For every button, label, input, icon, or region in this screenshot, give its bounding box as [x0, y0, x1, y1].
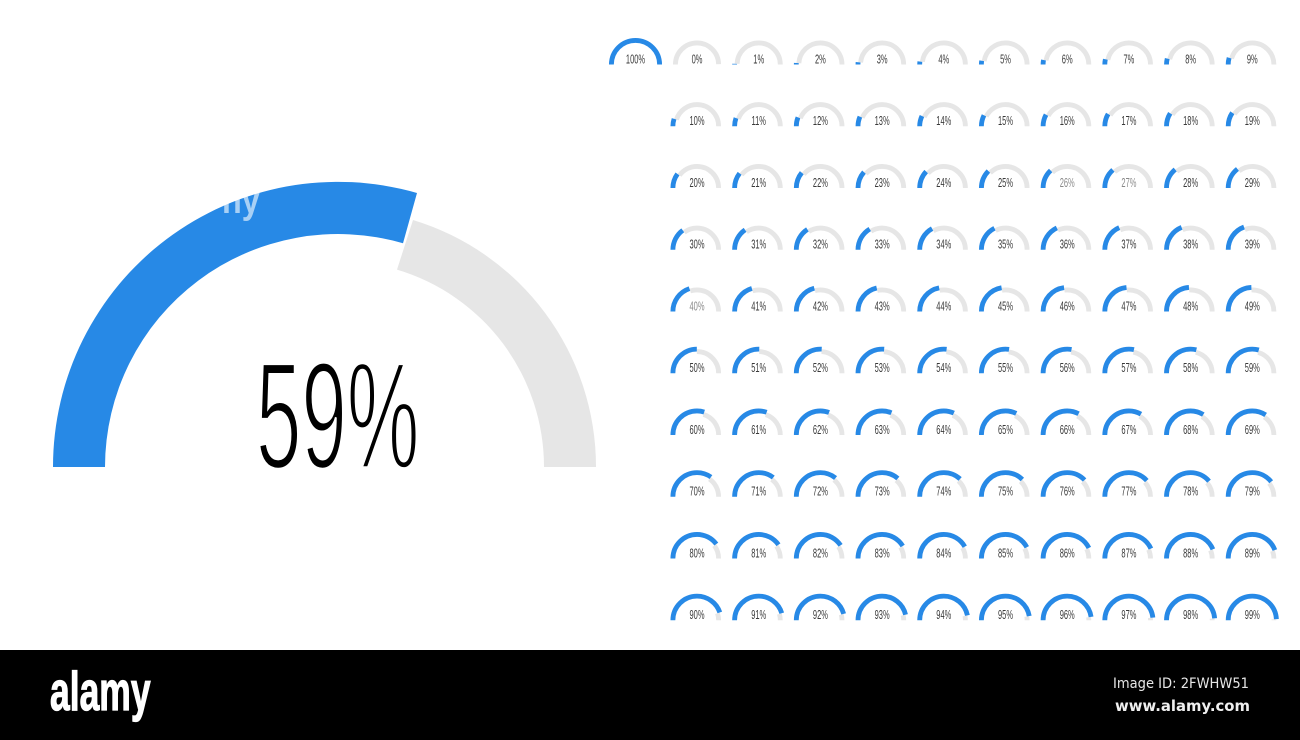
gauge 84%: 84%: [936, 548, 951, 561]
gauge 89%: 89%: [1245, 548, 1260, 561]
gauge 80%: [673, 534, 721, 561]
gauge 54%: [920, 349, 968, 376]
gauge 86%: 86%: [1060, 548, 1075, 561]
gauge 61%: 61%: [751, 424, 766, 438]
gauge 50%: 50%: [690, 362, 704, 376]
gauge 88%: [1166, 534, 1215, 561]
gauge 83%: [858, 534, 906, 561]
gauge 19%: [1228, 102, 1276, 129]
gauge 53%: 53%: [875, 362, 890, 376]
gauge 91%: 91%: [751, 609, 766, 623]
gauge 2%: [796, 40, 844, 67]
gauge 78%: [1166, 473, 1215, 499]
gauge 43%: [858, 287, 906, 314]
gauge 75%: 75%: [998, 486, 1013, 499]
gauge 68%: [1166, 411, 1215, 438]
gauge 92%: 92%: [813, 609, 828, 623]
gauge 23%: 23%: [875, 177, 890, 191]
gauge 12%: [796, 102, 844, 129]
gauge 94%: 94%: [936, 609, 951, 623]
gauge 43%: 43%: [875, 301, 890, 314]
gauge 29%: 29%: [1245, 177, 1260, 191]
gauge 33%: 33%: [875, 239, 890, 252]
gauge 67%: [1105, 411, 1153, 438]
gauge 69%: 69%: [1245, 424, 1260, 438]
gauge 21%: 21%: [751, 177, 766, 191]
gauge 44%: [920, 287, 968, 314]
gauge 65%: [981, 411, 1030, 438]
gauge 57%: 57%: [1121, 362, 1136, 376]
gauge 25%: [981, 164, 1030, 191]
gauge 36%: [1043, 226, 1091, 252]
gauge 82%: [796, 534, 844, 561]
gauge 61%: [735, 411, 783, 438]
gauge 19%: 19%: [1245, 115, 1260, 129]
gauge 18%: [1166, 102, 1215, 129]
gauge 56%: [1043, 349, 1091, 376]
gauge 11%: 11%: [751, 115, 766, 129]
gauge 8%: [1166, 40, 1215, 67]
gauge 18%: 18%: [1183, 115, 1198, 129]
gauge 69%: [1228, 411, 1276, 438]
gauge 87%: [1105, 534, 1153, 561]
gauge 10%: 10%: [690, 115, 704, 129]
gauge 20%: [673, 164, 721, 191]
gauge 97%: [1105, 596, 1153, 623]
alamy logo: alamy: [50, 660, 151, 722]
gauge 58%: [1166, 349, 1215, 376]
gauge 25%: 25%: [998, 177, 1013, 191]
gauge 23%: [858, 164, 906, 191]
gauge 48%: [1166, 287, 1215, 314]
gauge 14%: [920, 102, 968, 129]
gauge 72%: [796, 473, 844, 499]
gauge 49%: [1228, 287, 1276, 314]
gauge 14%: 14%: [936, 115, 951, 129]
gauge 77%: [1105, 473, 1153, 499]
gauge 77%: 77%: [1121, 486, 1136, 499]
gauge 70%: 70%: [690, 486, 704, 499]
gauge 38%: [1166, 226, 1215, 252]
gauge 82%: 82%: [813, 548, 828, 561]
gauge 68%: 68%: [1183, 424, 1198, 438]
gauge 37%: [1105, 226, 1153, 252]
gauge 71%: 71%: [751, 486, 766, 499]
gauge 35%: 35%: [998, 239, 1013, 252]
gauge 75%: [981, 473, 1030, 499]
footer band: [0, 650, 1300, 740]
gauge 93%: 93%: [875, 609, 890, 623]
gauge 39%: 39%: [1245, 239, 1260, 252]
gauge 15%: [981, 102, 1030, 129]
gauge 30%: 30%: [690, 239, 704, 252]
gauge 100%: [611, 40, 660, 67]
gauge 22%: 22%: [813, 177, 828, 191]
gauge 47%: 47%: [1121, 301, 1136, 314]
gauge 8%: 8%: [1185, 54, 1196, 67]
gauge 7%: 7%: [1123, 54, 1134, 67]
gauge 74%: 74%: [936, 486, 951, 499]
gauge 42%: [796, 287, 844, 314]
gauge 27%: [1105, 164, 1153, 191]
gauge 52%: 52%: [813, 362, 828, 376]
gauge 41%: 41%: [751, 301, 766, 314]
gauge 55%: [981, 349, 1030, 376]
gauge 90%: [673, 596, 721, 623]
gauge 9%: [1228, 40, 1276, 67]
gauge 99%: 99%: [1245, 609, 1260, 623]
gauge 55%: 55%: [998, 362, 1013, 376]
gauge 79%: 79%: [1245, 486, 1260, 499]
gauge 92%: [796, 596, 844, 623]
gauge 4%: [920, 40, 968, 67]
gauge 54%: 54%: [936, 362, 951, 376]
gauge 46%: [1043, 287, 1091, 314]
gauge 73%: 73%: [875, 486, 890, 499]
gauge 56%: 56%: [1060, 362, 1075, 376]
gauge 26%: 26%: [1060, 177, 1075, 191]
gauge 52%: [796, 349, 844, 376]
gauge 98%: 98%: [1183, 609, 1198, 623]
gauge 36%: 36%: [1060, 239, 1075, 252]
website: www.alamy.com: [1115, 697, 1250, 715]
gauge 76%: 76%: [1060, 486, 1075, 499]
gauge 60%: 60%: [690, 424, 704, 438]
gauge 48%: 48%: [1183, 301, 1198, 314]
watermark fragment: ny: [222, 180, 260, 222]
gauge 31%: 31%: [751, 239, 766, 252]
gauge 66%: 66%: [1060, 424, 1075, 438]
gauge 97%: 97%: [1121, 609, 1136, 623]
gauge 1%: [735, 40, 783, 67]
gauge 72%: 72%: [813, 486, 828, 499]
gauge 85%: 85%: [998, 548, 1013, 561]
gauge 37%: 37%: [1121, 239, 1136, 252]
gauge 3%: 3%: [877, 54, 888, 67]
gauge 45%: [981, 287, 1030, 314]
gauge 22%: [796, 164, 844, 191]
gauge 100%: 100%: [626, 54, 645, 67]
gauge 67%: 67%: [1121, 424, 1136, 438]
gauge 41%: [735, 287, 783, 314]
grey remainder arc: [397, 220, 596, 467]
gauge 16%: 16%: [1060, 115, 1075, 129]
gauge 59%: [1228, 349, 1276, 376]
gauge 26%: [1043, 164, 1091, 191]
gauge 35%: [981, 226, 1030, 252]
gauge 57%: [1105, 349, 1153, 376]
gauge 81%: 81%: [751, 548, 766, 561]
gauge 24%: [920, 164, 968, 191]
gauge 21%: [735, 164, 783, 191]
gauge 65%: 65%: [998, 424, 1013, 438]
gauge 62%: 62%: [813, 424, 828, 438]
gauge 84%: [920, 534, 968, 561]
large gauge 59%: [53, 180, 596, 500]
gauge 93%: [858, 596, 906, 623]
gauge 2%: 2%: [815, 54, 826, 67]
gauge 90%: 90%: [690, 609, 704, 623]
gauge 33%: [858, 226, 906, 252]
gauge 34%: [920, 226, 968, 252]
gauge 5%: [981, 40, 1030, 67]
gauge 39%: [1228, 226, 1276, 252]
gauge 5%: 5%: [1000, 54, 1011, 67]
gauge 60%: [673, 411, 721, 438]
gauge 10%: [673, 102, 721, 129]
gauge 73%: [858, 473, 906, 499]
gauge 1%: 1%: [753, 54, 764, 67]
gauge 62%: [796, 411, 844, 438]
image id: Image ID: 2FWHW51: [1113, 676, 1249, 692]
gauge 46%: 46%: [1060, 301, 1075, 314]
gauge 95%: [981, 596, 1030, 623]
gauge 89%: [1228, 534, 1276, 561]
gauge 80%: 80%: [690, 548, 704, 561]
gauge 32%: 32%: [813, 239, 828, 252]
gauge 38%: 38%: [1183, 239, 1198, 252]
gauge 81%: [735, 534, 783, 561]
large value label: 59%: [256, 331, 419, 500]
gauge 66%: [1043, 411, 1091, 438]
gauge 98%: [1166, 596, 1215, 623]
gauge 13%: 13%: [875, 115, 890, 129]
gauge 78%: 78%: [1183, 486, 1198, 499]
gauge 0%: [675, 43, 719, 67]
gauge 95%: 95%: [998, 609, 1013, 623]
gauge 0%: 0%: [692, 54, 702, 67]
gauge 63%: [858, 411, 906, 438]
gauge 51%: 51%: [751, 362, 766, 376]
gauge 64%: 64%: [936, 424, 951, 438]
gauge 30%: [673, 226, 721, 252]
gauge 79%: [1228, 473, 1276, 499]
gauge 50%: [673, 349, 721, 376]
gauge 88%: 88%: [1183, 548, 1198, 561]
gauge 17%: 17%: [1121, 115, 1136, 129]
gauge 34%: 34%: [936, 239, 951, 252]
gauge 83%: 83%: [875, 548, 890, 561]
gauge 47%: [1105, 287, 1153, 314]
blue progress arc: [53, 182, 417, 467]
gauge 44%: 44%: [936, 301, 951, 314]
gauge 9%: 9%: [1247, 54, 1258, 67]
gauge 28%: 28%: [1183, 177, 1198, 191]
gauge 87%: 87%: [1121, 548, 1136, 561]
gauge 3%: [858, 40, 906, 67]
gauge 40%: 40%: [690, 301, 704, 314]
gauge 4%: 4%: [938, 54, 949, 67]
gauge 86%: [1043, 534, 1091, 561]
gauge 32%: [796, 226, 844, 252]
gauge 40%: [673, 287, 721, 314]
gauge 76%: [1043, 473, 1091, 499]
gauge 71%: [735, 473, 783, 499]
gauge 94%: [920, 596, 968, 623]
gauge 11%: [735, 102, 783, 129]
gauge 31%: [735, 226, 783, 252]
gauge 96%: [1043, 596, 1091, 623]
gauge 85%: [981, 534, 1030, 561]
gauge 59%: 59%: [1245, 362, 1260, 376]
gauge 96%: 96%: [1060, 609, 1075, 623]
gauge 17%: [1105, 102, 1153, 129]
gauge 15%: 15%: [998, 115, 1013, 129]
gauge 91%: [735, 596, 783, 623]
gauge 63%: 63%: [875, 424, 890, 438]
gauge 45%: 45%: [998, 301, 1013, 314]
gauge 28%: [1166, 164, 1215, 191]
gauge 7%: [1105, 40, 1153, 67]
gauge 49%: 49%: [1245, 301, 1260, 314]
gauge 58%: 58%: [1183, 362, 1198, 376]
gauge 6%: 6%: [1062, 54, 1073, 67]
gauge 27%: 27%: [1121, 177, 1136, 191]
gauge 53%: [858, 349, 906, 376]
gauge 12%: 12%: [813, 115, 828, 129]
gauge 29%: [1228, 164, 1276, 191]
gauge 99%: [1228, 596, 1276, 623]
gauge grid: [611, 40, 1276, 623]
gauge 24%: 24%: [936, 177, 951, 191]
gauge 13%: [858, 102, 906, 129]
gauge 6%: [1043, 40, 1091, 67]
gauge 20%: 20%: [690, 177, 704, 191]
gauge 70%: [673, 473, 721, 499]
gauge 16%: [1043, 102, 1091, 129]
gauge 64%: [920, 411, 968, 438]
gauge 51%: [735, 349, 783, 376]
gauge 42%: 42%: [813, 301, 828, 314]
gauge 74%: [920, 473, 968, 499]
